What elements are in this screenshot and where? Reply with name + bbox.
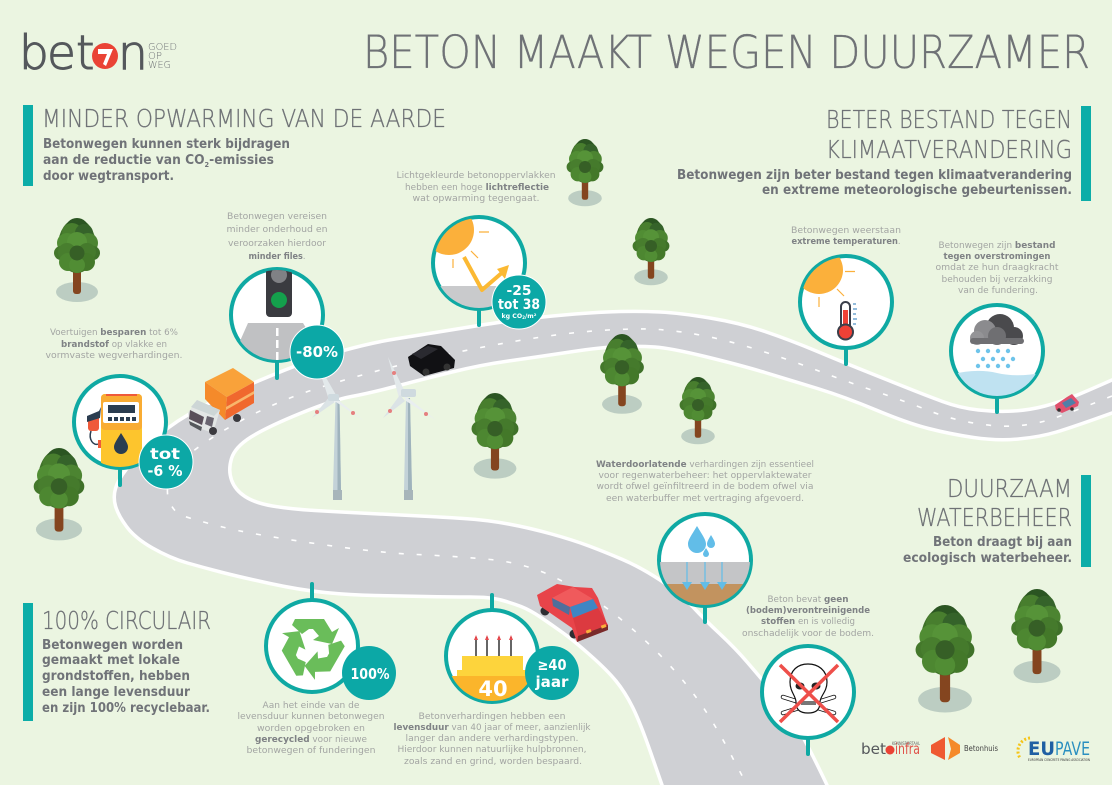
text: minder files: minder onderhoud en: [226, 225, 328, 235]
badge: 100%: 100%: [350, 665, 390, 683]
text: gerecycled: gerecycled voor nieuwe: [255, 735, 367, 745]
text: gerecycled: levensduur kunnen betonwegen: [238, 712, 384, 722]
subtext: Betonwegen worden: [42, 638, 183, 653]
text: brandstof: [46, 328, 182, 361]
text: geen verontreinigende stoffen: stoffen en is volledig: [761, 617, 855, 627]
text: geen verontreinigende stoffen: Beton bevat geen: [768, 595, 848, 605]
heading: [917, 474, 1072, 532]
text: gerecycled: betonwegen of funderingen: [246, 746, 376, 756]
truck: [188, 368, 254, 435]
icon: fuel pump: [87, 394, 142, 474]
logo: betoninfra: bet: [861, 740, 886, 758]
text: waterdoorlatend: Waterdoorlatende verhardingen zijn essentieel: [596, 460, 814, 470]
panel: duurzaam waterbeheer: [903, 474, 1091, 567]
pin: recycling: [266, 582, 358, 692]
subtext: ecologisch waterbeheer.: [903, 551, 1072, 566]
text: geen verontreinigende stoffen: [742, 595, 874, 639]
text: gerecycled: Aan het einde van de: [262, 701, 360, 711]
subtext: gemaakt met lokale: [42, 653, 180, 668]
logo: beton goed op weg: [19, 26, 177, 81]
heading: 100% CIRCULAIR: [42, 606, 211, 635]
red car: [537, 584, 608, 642]
badge: tot -6 %: [139, 435, 193, 489]
text: brandstof: Voertuigen besparen tot 6%: [50, 328, 178, 338]
logo: beton goed op weg: WEG: [148, 60, 171, 71]
icon: sun reflection: [436, 218, 509, 308]
icon: recycling arrows: [274, 619, 346, 684]
logo: betoninfra: KENNISPORTAAL: [892, 741, 921, 746]
subtext: Betonwegen kunnen sterk bijdragen: [43, 137, 290, 152]
badge: -25 tot 38: 2: [522, 315, 525, 320]
heading: DUURZAAM: [947, 474, 1072, 503]
text: gerecycled: worden opgebroken en: [257, 724, 365, 734]
pin: minder files: [229, 267, 325, 380]
badge: -25 tot 38: tot 38: [498, 297, 540, 313]
badge: -80%: [290, 325, 344, 379]
text: minder files: [226, 212, 328, 262]
subtext: [677, 168, 1072, 198]
badge: -25 tot 38: -25: [506, 284, 532, 299]
icon: water infiltration: [660, 526, 750, 605]
badge: tot -6 %: -6 %: [148, 462, 182, 480]
text: extreme temperaturen: extreme temperaturen.: [792, 237, 901, 247]
subtext: [43, 137, 290, 184]
text: waterdoorlatend: [596, 460, 814, 504]
black car: [408, 344, 455, 376]
text: minder files: veroorzaken hierdoor: [228, 239, 326, 249]
wind turbine right: [383, 357, 436, 500]
pink car: [1055, 394, 1079, 413]
text: waterdoorlatend: een waterbuffer met vertraging afgevoerd.: [606, 494, 804, 504]
text: levensduur: Hierdoor kunnen natuurlijke hulpbronnen,: [398, 745, 586, 755]
text: gerecycled: [238, 701, 384, 756]
panel: klimaatverandering: [677, 105, 1091, 201]
heading: KLIMAATVERANDERING: [826, 135, 1072, 164]
logo: betoninfra: [861, 740, 921, 758]
pin: waterdoorlatend: [655, 514, 755, 624]
text: brandstof: vormvaste wegverhardingen.: [46, 351, 182, 361]
logo: betonhuis: Betonhuis: [964, 744, 998, 753]
text: levensduur: zoals zand en grind, worden bespaard.: [404, 757, 582, 767]
icon: birthday cake: 40: [478, 677, 508, 701]
subtext: en zijn 100% recyclebaar.: [42, 701, 210, 716]
text: waterdoorlatend: voor regenwaterbeheer: het oppervlaktewater: [598, 471, 812, 481]
text: overstromingen: tegen overstromingen: [944, 252, 1050, 262]
logo: beton goed op weg: GOED: [148, 42, 177, 53]
badge: ≥40 jaar: [525, 646, 579, 700]
logo: eupave: PAVE: [1055, 738, 1090, 760]
text: minder files: Betonwegen vereisen: [227, 212, 327, 222]
badge: -25 tot 38: kg CO: [502, 313, 521, 320]
heading: WATERBEHEER: [917, 503, 1072, 532]
text: lichtreflectie: Lichtgekleurde betonoppervlakken: [396, 171, 556, 181]
text: overstromingen: omdat ze hun draagkracht: [936, 263, 1059, 273]
text: geen verontreinigende stoffen: (bodem)verontreinigende: [746, 606, 870, 616]
wind turbine left: [312, 360, 364, 500]
text: overstromingen: [936, 241, 1059, 296]
text: overstromingen: van de fundering.: [958, 286, 1038, 296]
logo: beton goed op weg: OP: [148, 51, 162, 62]
icon: traffic light: [240, 270, 306, 360]
text: levensduur: Betonverhardingen hebben een: [418, 712, 566, 722]
text: lichtreflectie: wat opwarming tegengaat.: [412, 194, 540, 204]
pin: lichtreflectie: [431, 215, 527, 327]
subtext: [42, 638, 210, 716]
heading: MINDER OPWARMING VAN DE AARDE: [42, 104, 446, 133]
text: geen verontreinigende stoffen: onschadelijk voor de bodem.: [742, 629, 874, 639]
badge: tot -6 %: tot: [150, 445, 180, 463]
badge: 100%: [342, 646, 396, 700]
subtext: een lange levensduur: [42, 685, 191, 700]
text: waterdoorlatend: wordt ofwel geïnfiltreerd in de bodem ofwel via: [596, 482, 814, 492]
text: brandstof: brandstof op vlakke en: [61, 340, 167, 350]
subtext: en extreme meteorologische gebeurtenissen.: [762, 183, 1072, 198]
icon: crossed skull: [780, 664, 838, 722]
subtext: -emissies: [209, 153, 274, 168]
text: overstromingen: Betonwegen zijn bestand: [938, 241, 1056, 251]
logo: eupave: EU: [1028, 738, 1055, 760]
text: levensduur: langer dan andere verhardingstypen.: [406, 734, 578, 744]
subtext: Betonwegen zijn beter bestand tegen klimaatverandering: [677, 168, 1072, 183]
pin: geen gif: [762, 646, 854, 756]
panel: 100% circulair: [23, 603, 211, 721]
subtext: [903, 535, 1072, 566]
subtext: door wegtransport.: [43, 169, 174, 184]
text: overstromingen: behouden bij verzakking: [942, 275, 1052, 285]
badge: -25 tot 38: /m²: [525, 313, 537, 320]
text: lichtreflectie: [396, 171, 556, 204]
subtext: Beton draagt bij aan: [933, 535, 1072, 550]
text: extreme temperaturen: Betonwegen weerstaan: [791, 226, 901, 236]
road: [114, 311, 1112, 785]
pin: levensduur: [446, 593, 538, 708]
icon: cloud and rain: [958, 314, 1036, 396]
logo: eupave: [1018, 738, 1091, 762]
heading: [826, 105, 1072, 164]
trees: [34, 139, 1063, 713]
logo: betoninfra: infra: [895, 740, 920, 758]
text: lichtreflectie: hebben een hoge lichtreflectie: [405, 183, 549, 193]
pin: brandstof: [74, 376, 166, 487]
badge: -80%: -80%: [296, 343, 338, 361]
subtext: aan de reductie van CO: [43, 153, 214, 168]
text: levensduur: levensduur van 40 jaar of meer, aanzienlijk: [394, 723, 591, 733]
logo: betonhuis: [931, 737, 998, 760]
badge: ≥40 jaar: ≥40: [538, 656, 566, 674]
text: minder files: minder files.: [248, 252, 306, 262]
pin: extreme temperaturen: [795, 246, 892, 366]
logo: beton goed op weg: n: [118, 26, 148, 81]
badge: ≥40 jaar: jaar: [534, 673, 569, 691]
subtext: 2: [205, 161, 209, 169]
panel: minder opwarming: [23, 104, 446, 186]
icon: sun and thermometer: [803, 258, 857, 340]
subtext: grondstoffen, hebben: [42, 669, 190, 684]
text: extreme temperaturen: [791, 226, 901, 247]
logo: beton goed op weg: bet: [19, 26, 94, 81]
logo: eupave: EUROPEAN CONCRETE PAVING ASSOCIATION: [1028, 758, 1091, 762]
badge: -25 tot 38: [492, 275, 546, 329]
text: levensduur: [394, 712, 591, 767]
pin: overstromingen: [950, 305, 1045, 414]
